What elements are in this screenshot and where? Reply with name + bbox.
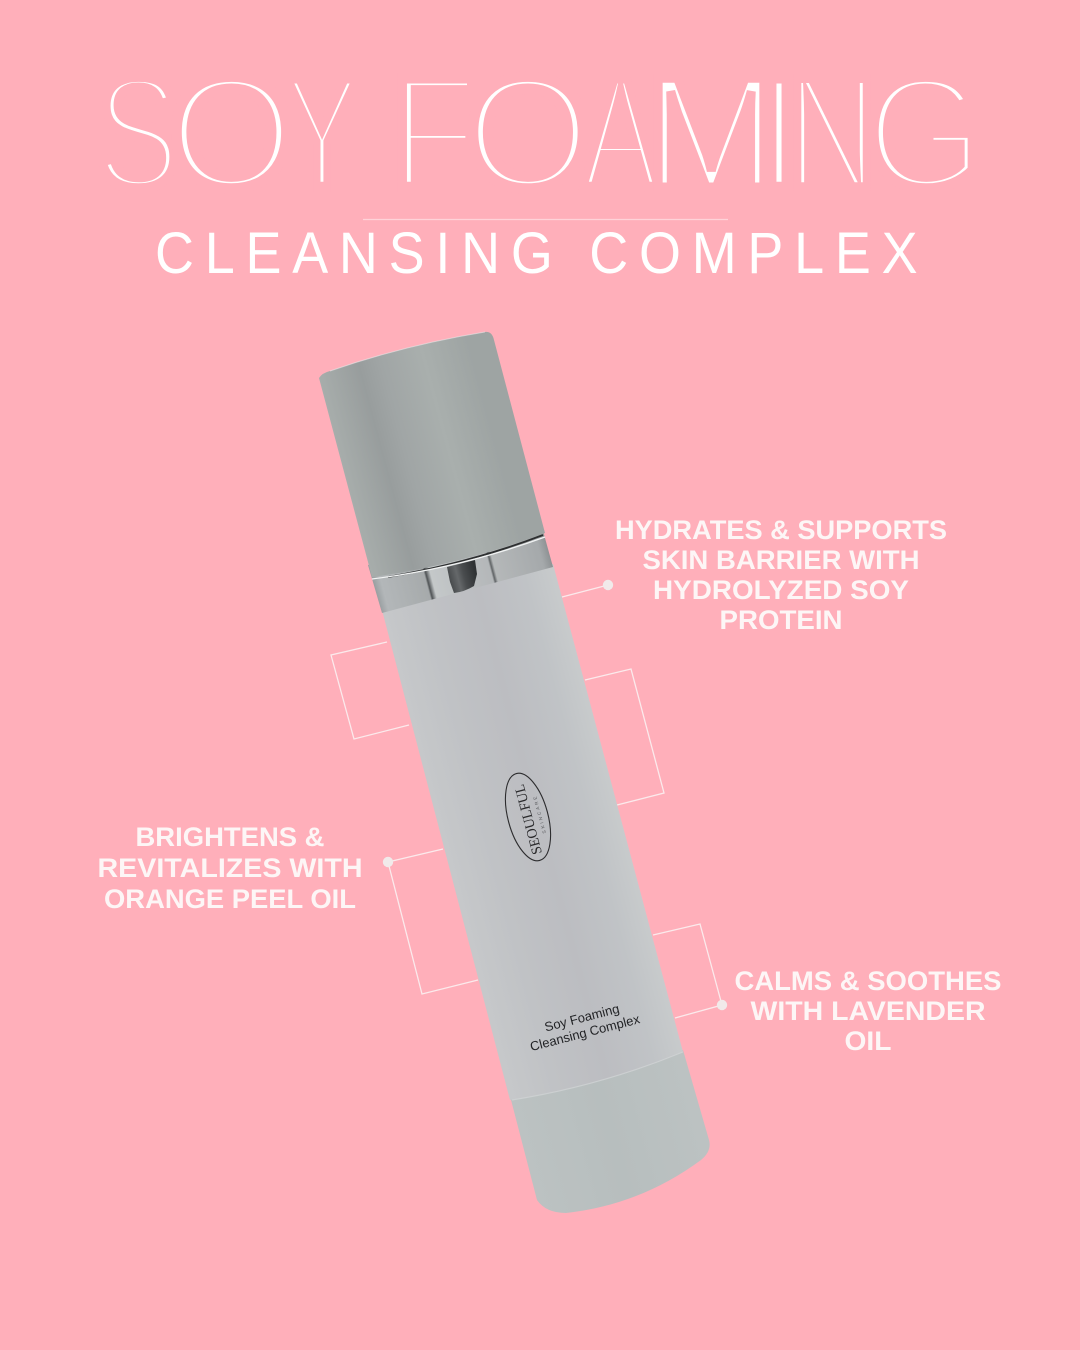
- callout: brightens: ORANGE PEEL OIL: [104, 884, 356, 914]
- dot: calms: [717, 1000, 727, 1010]
- logo: [497, 768, 559, 866]
- title divider: [363, 218, 728, 220]
- bottle body: [382, 564, 683, 1100]
- title: G: [866, 44, 984, 221]
- callout: brightens: BRIGHTENS &: [136, 822, 324, 852]
- callout: calms: WITH LAVENDER: [750, 996, 986, 1026]
- chrome reflection: [447, 560, 477, 593]
- callout: calms: CALMS & SOOTHES: [734, 966, 1002, 996]
- title: F: [391, 44, 477, 221]
- title: S: [97, 45, 179, 222]
- connector dots: [383, 580, 727, 1010]
- callout: brightens: [98, 822, 362, 914]
- title: O: [169, 44, 294, 221]
- connector: right bracket: [585, 669, 664, 805]
- callout: hydrates: HYDROLYZED SOY: [653, 575, 909, 605]
- bottle base: [510, 1050, 710, 1213]
- title: [97, 44, 984, 222]
- bottle cap: [319, 332, 545, 577]
- cap gap shadow: [388, 535, 543, 577]
- callout: brightens: REVITALIZES WITH: [98, 853, 362, 883]
- logo wordmark: SEOULFUL: [512, 782, 546, 856]
- label line 2: Cleansing Complex: [528, 1011, 642, 1054]
- title: Y: [285, 44, 359, 221]
- callout: hydrates: SKIN BARRIER WITH: [642, 545, 920, 575]
- connector: calms: [653, 924, 722, 1018]
- dot: brightens: [383, 857, 393, 867]
- title: A: [583, 45, 658, 222]
- logo tagline: SKINCARE: [532, 796, 547, 834]
- cap top highlight: [330, 332, 485, 371]
- title: N: [788, 45, 876, 222]
- connector lines: [331, 585, 722, 1018]
- title: M: [645, 45, 777, 221]
- title: I: [753, 44, 805, 220]
- base edge highlight: [512, 1052, 683, 1100]
- callout: hydrates: [615, 515, 947, 635]
- subtitle: CLEANSING COMPLEX: [155, 220, 918, 285]
- bottle chrome band: [368, 520, 553, 613]
- callout: calms: [734, 966, 1002, 1056]
- dot: hydrates: [603, 580, 613, 590]
- bottle: [319, 332, 710, 1213]
- callout: calms: OIL: [844, 1026, 892, 1056]
- connector: brightens: [388, 849, 478, 994]
- band highlight: [372, 537, 545, 579]
- callout: hydrates: HYDRATES & SUPPORTS: [615, 515, 947, 545]
- title: O: [465, 44, 591, 221]
- logo oval: [497, 768, 559, 866]
- label line 1: Soy Foaming: [543, 1001, 621, 1034]
- product label: [528, 1001, 642, 1054]
- callout: hydrates: PROTEIN: [720, 605, 842, 635]
- connector: hydrates: [562, 585, 608, 597]
- connector: left bracket: [331, 642, 409, 739]
